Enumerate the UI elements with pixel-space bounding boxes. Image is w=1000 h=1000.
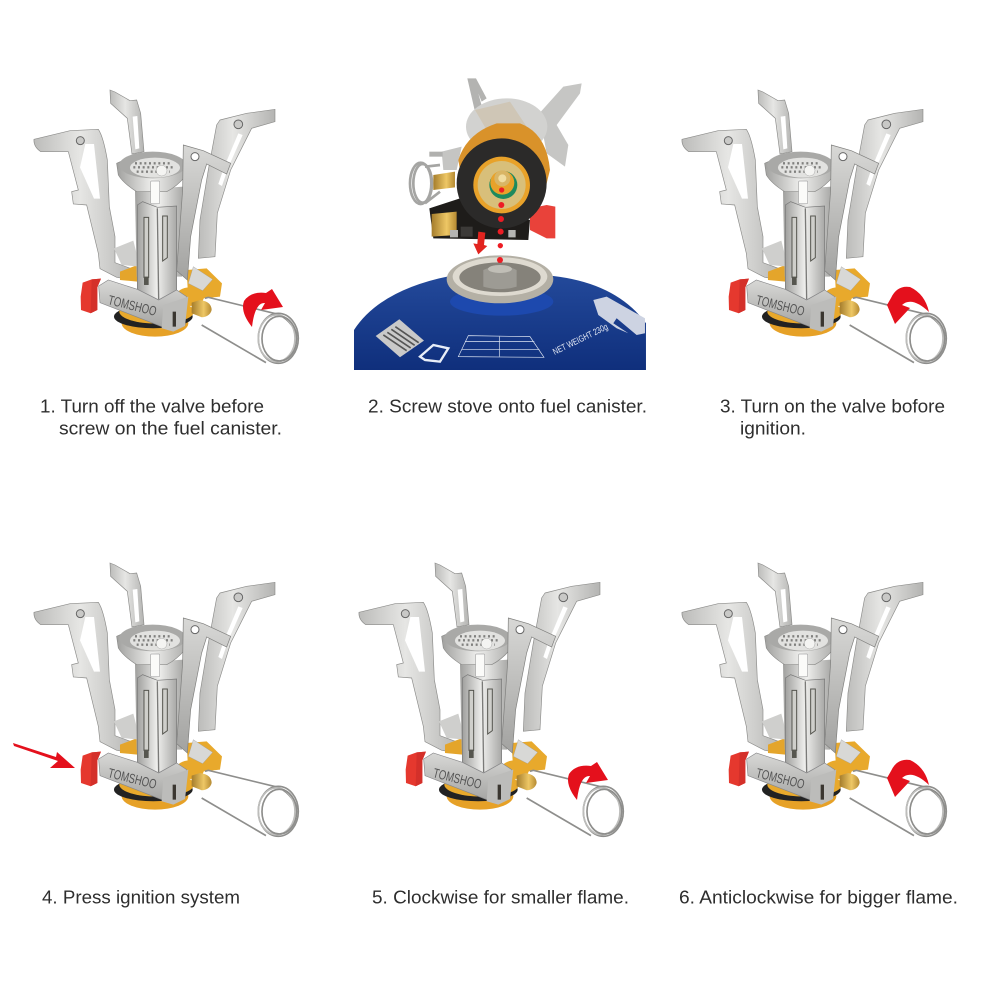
caption: step 5: 5. Clockwise for smaller flame. (372, 888, 629, 908)
ignition body (429, 198, 555, 240)
icon: clockwise arrow (568, 762, 608, 800)
net weight: NET WEIGHT 230g (551, 321, 609, 357)
caption: step 1 (40, 396, 282, 438)
brand label: TOMSHOO (755, 292, 806, 319)
brand label: TOMSHOO (107, 765, 158, 792)
caption: step 1: 1. Turn off the valve before (40, 396, 264, 416)
icon: anticlockwise arrow (887, 760, 929, 797)
caption: step 4: 4. Press ignition system (42, 888, 240, 908)
brand label: TOMSHOO (432, 765, 483, 792)
recycle mark (420, 345, 448, 362)
panel: step 3 stove (682, 90, 946, 363)
panel: step 5 stove (359, 563, 623, 836)
arrow: press ignition (13, 743, 75, 768)
brand label: TOMSHOO (107, 292, 158, 319)
brand label: TOMSHOO (755, 765, 806, 792)
arrow: down (473, 232, 487, 254)
caption: step 6: 6. Anticlockwise for bigger flame. (679, 888, 958, 908)
brass valve (433, 172, 455, 190)
panel: step 4 stove (13, 563, 298, 836)
canister (354, 255, 646, 370)
spec table (458, 336, 544, 357)
icon: clockwise arrow (243, 289, 283, 327)
caption: step 1: screw on the fuel canister. (59, 418, 282, 438)
dotted red guide (497, 187, 504, 263)
barcode sticker (376, 319, 424, 357)
rubber gasket (457, 138, 547, 228)
caption: step 3 (720, 396, 945, 438)
caption: step 3: 3. Turn on the valve bofore (720, 396, 945, 416)
caption: step 3: ignition. (740, 418, 806, 438)
panel: step 6 stove (682, 563, 946, 836)
panel: step 2 stove on canister (354, 78, 646, 370)
panel: step 1 stove (34, 90, 298, 363)
icon: anticlockwise arrow (887, 287, 929, 324)
caption: step 2: 2. Screw stove onto fuel canister. (368, 396, 647, 416)
orange knurled ring (458, 123, 550, 183)
fitting (473, 157, 530, 213)
canister logo (593, 297, 645, 335)
wire ring (410, 163, 440, 204)
stove back parts (429, 78, 582, 170)
